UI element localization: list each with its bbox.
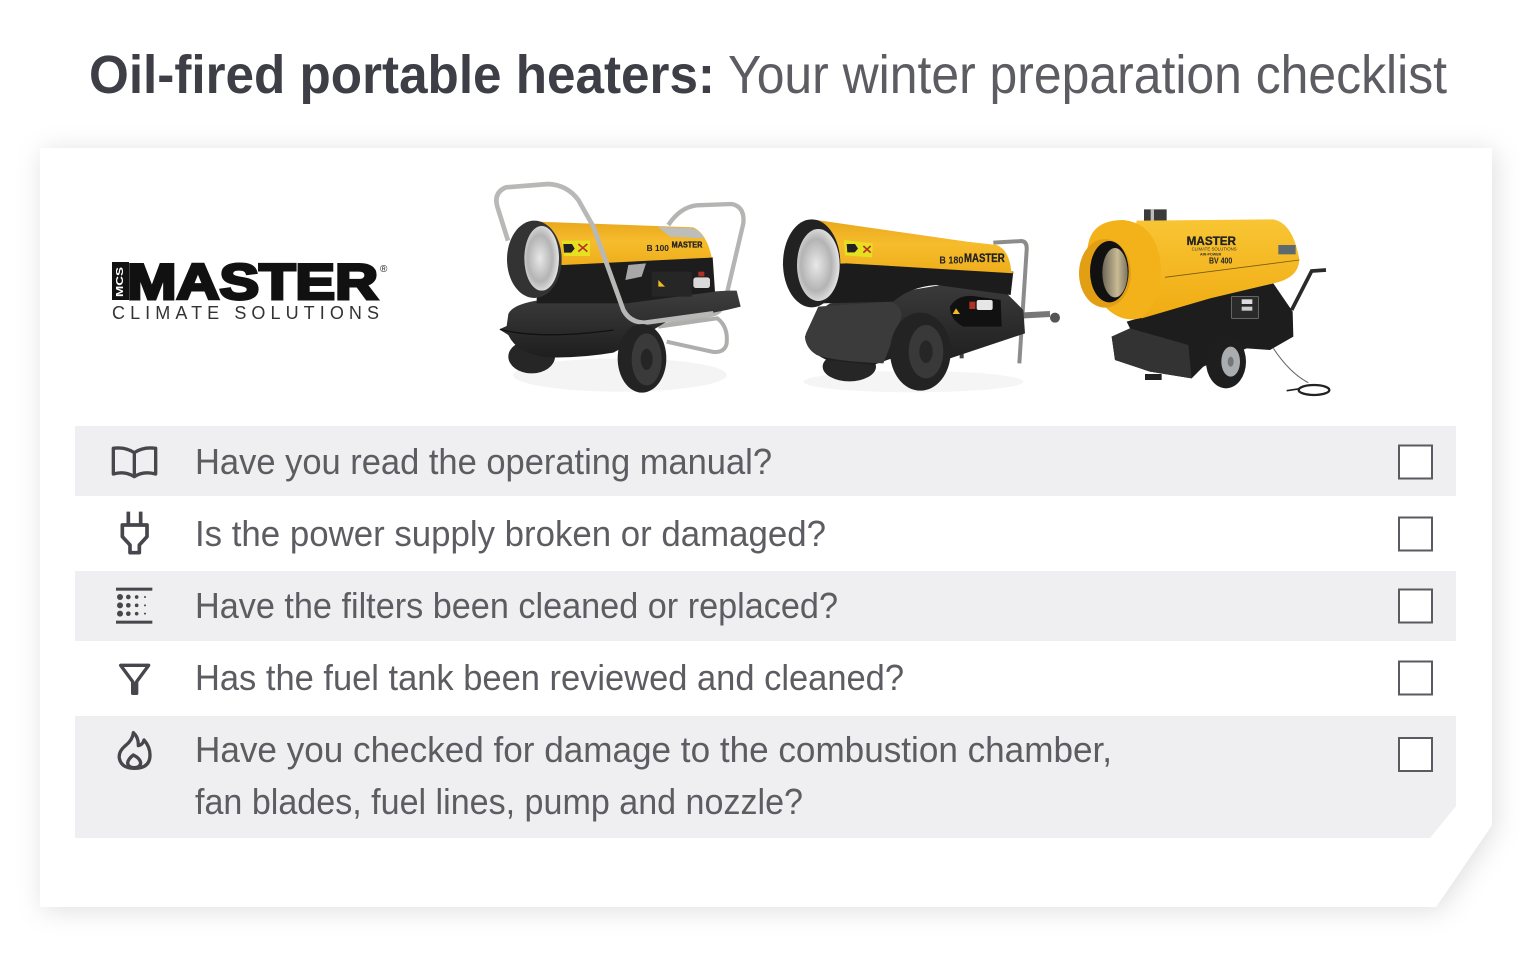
question: filters: Have the filters been cleaned or replaced? <box>195 585 838 626</box>
question: combustion chamber: fan blades, fuel lines, pump and nozzle? <box>195 781 803 822</box>
icon: funnel <box>121 665 149 693</box>
heater: B 180: MASTER <box>964 252 1005 265</box>
checkbox: fuel tank <box>1399 662 1432 694</box>
heater: B 180 <box>783 219 1060 392</box>
heater: B 180: B 180 <box>939 255 964 266</box>
heater: B 100: MASTER <box>672 239 702 249</box>
heater: BV 400: AIR-POWER <box>1200 251 1221 256</box>
row background: filters <box>75 571 1456 641</box>
logo: Master Climate Solutions: ® <box>380 264 388 275</box>
title: Oil-fired portable heaters: <box>89 45 715 105</box>
checkbox: filters <box>1399 590 1432 622</box>
heater: BV 400: BV 400 <box>1209 257 1233 266</box>
checkbox: manual <box>1399 446 1432 478</box>
title <box>89 45 1447 105</box>
checkbox: combustion chamber <box>1399 738 1432 771</box>
heater: B 100: B 100 <box>647 243 669 253</box>
question: power supply: Is the power supply broken or damaged? <box>195 513 826 554</box>
question: combustion chamber: Have you checked for damage to the combustion chamber, <box>195 729 1112 770</box>
icon: plug <box>122 512 147 553</box>
logo: Master Climate Solutions: MCS <box>114 267 126 297</box>
panel: checklist card <box>40 148 1492 907</box>
row background: manual <box>75 426 1456 496</box>
question: manual: Have you read the operating manual? <box>195 441 772 482</box>
icon: filter <box>116 588 152 624</box>
icon: book <box>113 448 156 477</box>
icon: flame <box>119 733 150 768</box>
heater: BV 400: MASTER <box>1187 234 1236 248</box>
heater: BV 400: CLIMATE SOLUTIONS <box>1192 247 1237 253</box>
heater: B 100 <box>496 184 744 393</box>
checkbox: power supply <box>1399 518 1432 550</box>
panel: checklist rows <box>75 426 1456 838</box>
heater: BV 400 <box>1079 209 1329 395</box>
logo: Master Climate Solutions <box>112 254 388 323</box>
title: Your winter preparation checklist <box>728 45 1447 105</box>
logo: Master Climate Solutions: MASTER <box>127 254 378 310</box>
logo: Master Climate Solutions: CLIMATE SOLUTIONS <box>112 303 379 323</box>
question: fuel tank: Has the fuel tank been reviewed and cleaned? <box>195 657 904 698</box>
row background: combustion <box>75 716 1456 838</box>
